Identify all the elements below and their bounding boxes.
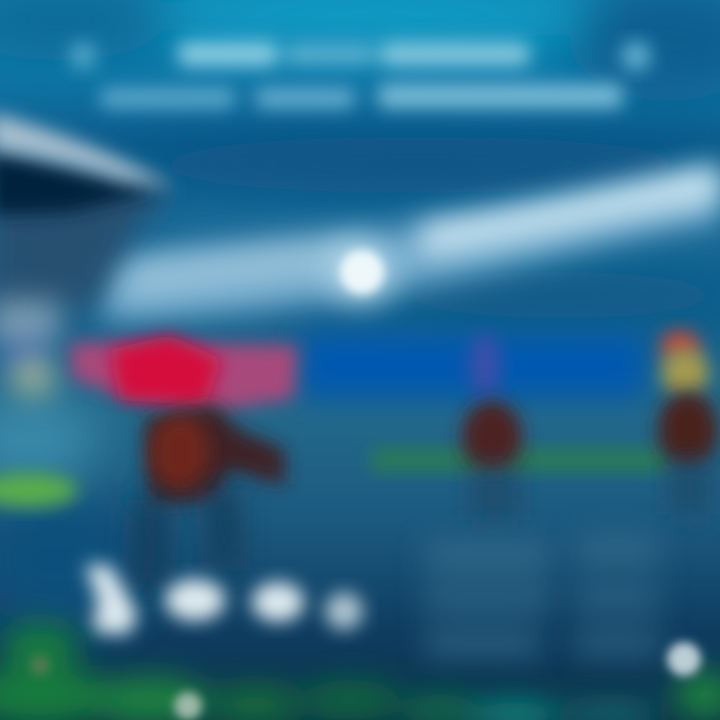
stadium stands <box>0 300 60 396</box>
green field right <box>370 448 670 472</box>
foreground foliage <box>0 623 720 720</box>
blue jockey and horse, centre <box>462 333 522 520</box>
icon: first white mark <box>85 565 138 635</box>
icon: third white mark <box>252 582 304 622</box>
red jockey and horse, left <box>70 335 298 590</box>
row of white icons <box>85 565 363 635</box>
sun glow <box>328 238 396 306</box>
yellow and red jockey and horse, right <box>658 330 718 515</box>
title blurred text block <box>100 42 623 108</box>
red silks <box>110 335 222 405</box>
icon: fourth white mark <box>325 592 363 630</box>
green field left <box>0 473 78 507</box>
white flowers <box>30 642 701 720</box>
pink banner <box>70 342 298 410</box>
glowing horizon streak <box>100 170 720 322</box>
title side icons <box>69 41 651 71</box>
horse body <box>145 405 285 505</box>
blue flag band <box>300 335 645 397</box>
stadium roof <box>0 112 175 325</box>
horse legs <box>130 490 240 590</box>
blurred text panel right <box>575 535 660 655</box>
bright horizon highlight <box>120 166 720 300</box>
blurred text panel centre <box>425 540 550 655</box>
icon: second white mark <box>165 579 225 621</box>
